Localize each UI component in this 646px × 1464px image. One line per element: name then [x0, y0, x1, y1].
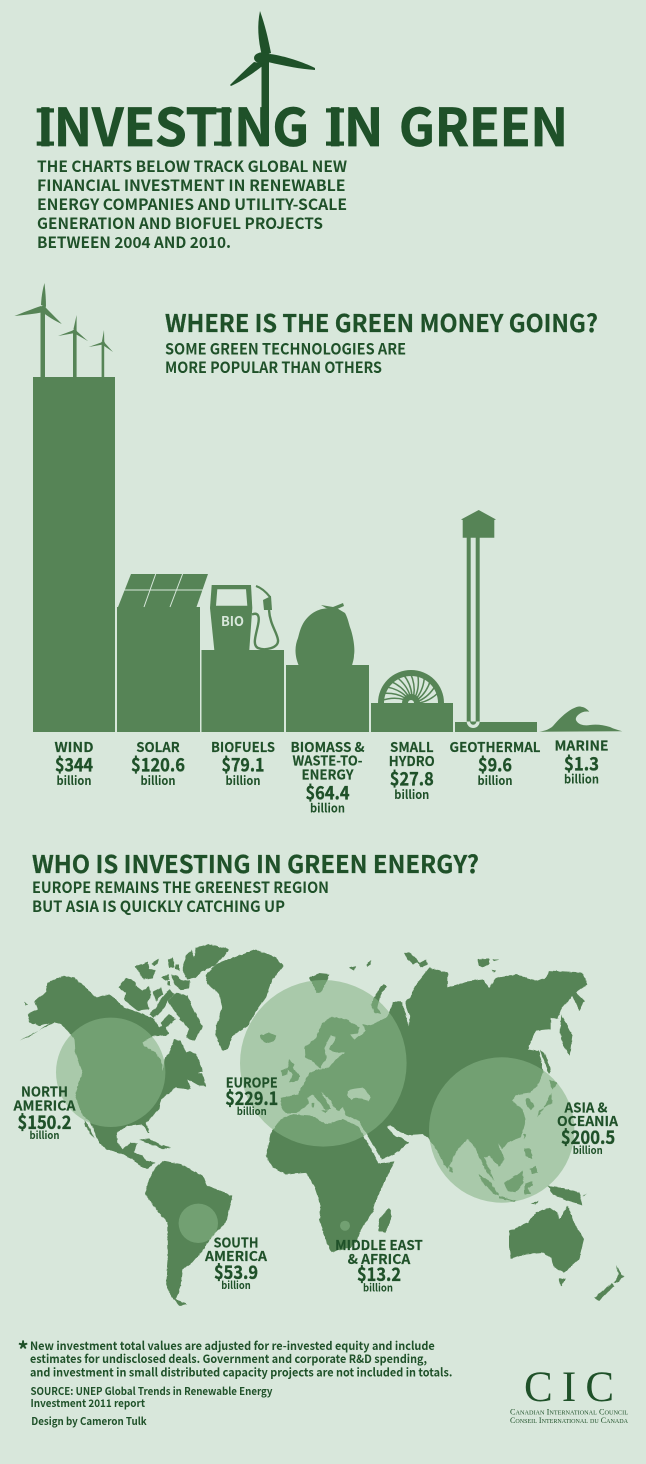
- label: north america: billion: [30, 1128, 60, 1143]
- heading: where is the green money going: WHERE IS THE GREEN MONEY GOING?: [165, 305, 598, 340]
- label: solar: SOLAR: [136, 736, 180, 756]
- label: wind: billion: [56, 772, 92, 789]
- label: biofuels: [211, 736, 275, 789]
- logo: CIC: Canadian International Council: [510, 1407, 628, 1416]
- world map: [21, 945, 625, 1307]
- label: marine: billion: [564, 771, 599, 788]
- source: SOURCE: UNEP Global Trends in Renewable Energy: [30, 1384, 272, 1399]
- label: geothermal: GEOTHERMAL: [450, 736, 541, 756]
- bar: biomass with bag: [286, 603, 369, 732]
- source: Investment 2011 report: [30, 1396, 146, 1411]
- map labels: [12, 1071, 618, 1296]
- label: middle east and africa: $13.2: [357, 1261, 401, 1287]
- label: wind: $344: [55, 752, 93, 778]
- bubble: north america: [56, 1018, 165, 1127]
- bar: biofuels with pump: [202, 585, 284, 732]
- label: north america: [12, 1081, 76, 1143]
- label: south america: $53.9: [214, 1259, 258, 1285]
- label: small hydro: $27.8: [390, 766, 434, 792]
- label: north america: NORTH: [21, 1081, 68, 1101]
- heading: where is the green money going: MORE POPULAR THAN OTHERS: [165, 356, 382, 378]
- label: small hydro: HYDRO: [389, 750, 435, 770]
- label: asia and oceania: $200.5: [561, 1124, 615, 1150]
- intro text: GENERATION AND BIOFUEL PROJECTS: [37, 212, 323, 234]
- label: wind: WIND: [54, 736, 94, 756]
- logo: CIC: CIC: [524, 1364, 614, 1411]
- logo: CIC: Conseil International du Canada: [510, 1416, 629, 1425]
- logo: CIC: [510, 1364, 629, 1425]
- label: asia and oceania: [557, 1096, 618, 1158]
- design credit: Design by Cameron Tulk: [31, 1414, 147, 1429]
- label: solar: $120.6: [131, 752, 185, 778]
- title text: [37, 86, 568, 161]
- label: north america: $150.2: [18, 1109, 72, 1135]
- label: solar: [131, 736, 185, 789]
- label: biomass: billion: [310, 799, 345, 816]
- bubble: europe: [240, 980, 407, 1147]
- label: europe: EUROPE: [226, 1071, 278, 1091]
- title text: IN: [326, 86, 384, 161]
- label: marine: MARINE: [554, 735, 608, 755]
- label: europe: [225, 1071, 278, 1119]
- map: Arctic archipelago: [119, 945, 230, 1042]
- icon: title wind turbine: [230, 11, 315, 146]
- label: biomass: [290, 736, 365, 816]
- intro text: THE CHARTS BELOW TRACK GLOBAL NEW: [37, 155, 347, 177]
- footnote text: estimates for undisclosed deals. Government and corporate R&D spending,: [30, 1351, 427, 1367]
- map: Americas and Greenland: [21, 950, 284, 1307]
- label: europe: $229.1: [225, 1085, 278, 1111]
- source: [30, 1384, 272, 1411]
- bar: small hydro with turbine wheel: [371, 670, 453, 732]
- label: marine: [554, 735, 608, 788]
- map: Europe: [261, 974, 403, 1127]
- heading: where is the green money going: [165, 305, 598, 378]
- label: biomass: ENERGY: [302, 763, 354, 783]
- title with wind turbine: [37, 11, 568, 161]
- label: small hydro: billion: [394, 786, 429, 803]
- bar: geothermal with plant: [455, 510, 537, 732]
- footnote: [18, 1333, 452, 1429]
- map: land masses: [21, 945, 625, 1307]
- heading: who is investing: [32, 846, 479, 917]
- bubble: south america: [179, 1204, 218, 1243]
- heading: who is investing: WHO IS INVESTING IN GREEN ENERGY?: [32, 846, 479, 881]
- label: middle east and africa: [335, 1234, 423, 1296]
- label: south america: AMERICA: [204, 1245, 267, 1265]
- bar: solar with panel: [117, 574, 208, 732]
- label: south america: SOUTH: [214, 1231, 258, 1251]
- label: north america: AMERICA: [12, 1095, 76, 1115]
- label: asia and oceania: billion: [573, 1143, 603, 1158]
- bar: biofuels with pump: BIO: [221, 610, 244, 630]
- footnote text: [30, 1338, 452, 1381]
- label: middle east and africa: billion: [363, 1281, 393, 1296]
- asterisk: *: [18, 1333, 29, 1365]
- label: middle east and africa: MIDDLE EAST: [335, 1234, 423, 1254]
- label: asia and oceania: OCEANIA: [557, 1110, 618, 1130]
- map: Asia, Africa and Oceania: [267, 953, 625, 1302]
- label: biofuels: billion: [226, 772, 260, 789]
- heading: who is investing: EUROPE REMAINS THE GREENEST REGION: [32, 876, 329, 898]
- label: small hydro: [389, 736, 435, 803]
- footnote text: and investment in small distributed capacity projects are not included in totals.: [30, 1365, 452, 1381]
- bar: marine with wave: [539, 706, 622, 732]
- label: europe: billion: [237, 1104, 267, 1119]
- label: wind: [54, 736, 94, 789]
- label: solar: billion: [140, 772, 176, 789]
- label: middle east and africa: & AFRICA: [348, 1248, 411, 1268]
- intro text: [37, 155, 347, 253]
- label: biofuels: $79.1: [222, 752, 264, 778]
- label: biofuels: BIOFUELS: [211, 736, 275, 756]
- intro text: FINANCIAL INVESTMENT IN RENEWABLE: [37, 174, 346, 196]
- title text: INVESTING: [37, 86, 309, 161]
- label: asia and oceania: ASIA &: [564, 1096, 608, 1116]
- intro text: BETWEEN 2004 AND 2010.: [37, 231, 231, 253]
- label: geothermal: billion: [478, 772, 512, 789]
- label: south america: billion: [221, 1278, 251, 1293]
- label: biomass: BIOMASS &: [290, 736, 365, 756]
- label: biomass: WASTE-TO-: [292, 750, 362, 770]
- label: south america: [204, 1231, 267, 1293]
- labels: technology values: [54, 735, 608, 816]
- label: small hydro: SMALL: [390, 736, 434, 756]
- bubble: middle east and africa: [340, 1221, 350, 1231]
- label: geothermal: [450, 736, 541, 789]
- panel: technology bar chart: [14, 283, 622, 732]
- bubble: asia and oceania: [429, 1057, 574, 1203]
- label: geothermal: $9.6: [478, 752, 512, 778]
- footnote text: New investment total values are adjusted for re-invested equity and include: [30, 1338, 435, 1354]
- bar: wind with turbines: [14, 283, 115, 732]
- intro text: ENERGY COMPANIES AND UTILITY-SCALE: [37, 193, 347, 215]
- label: biomass: $64.4: [306, 779, 350, 805]
- title text: GREEN: [399, 86, 568, 161]
- heading: who is investing: BUT ASIA IS QUICKLY CATCHING UP: [32, 895, 285, 917]
- label: marine: $1.3: [564, 751, 599, 777]
- heading: where is the green money going: SOME GREEN TECHNOLOGIES ARE: [165, 338, 406, 360]
